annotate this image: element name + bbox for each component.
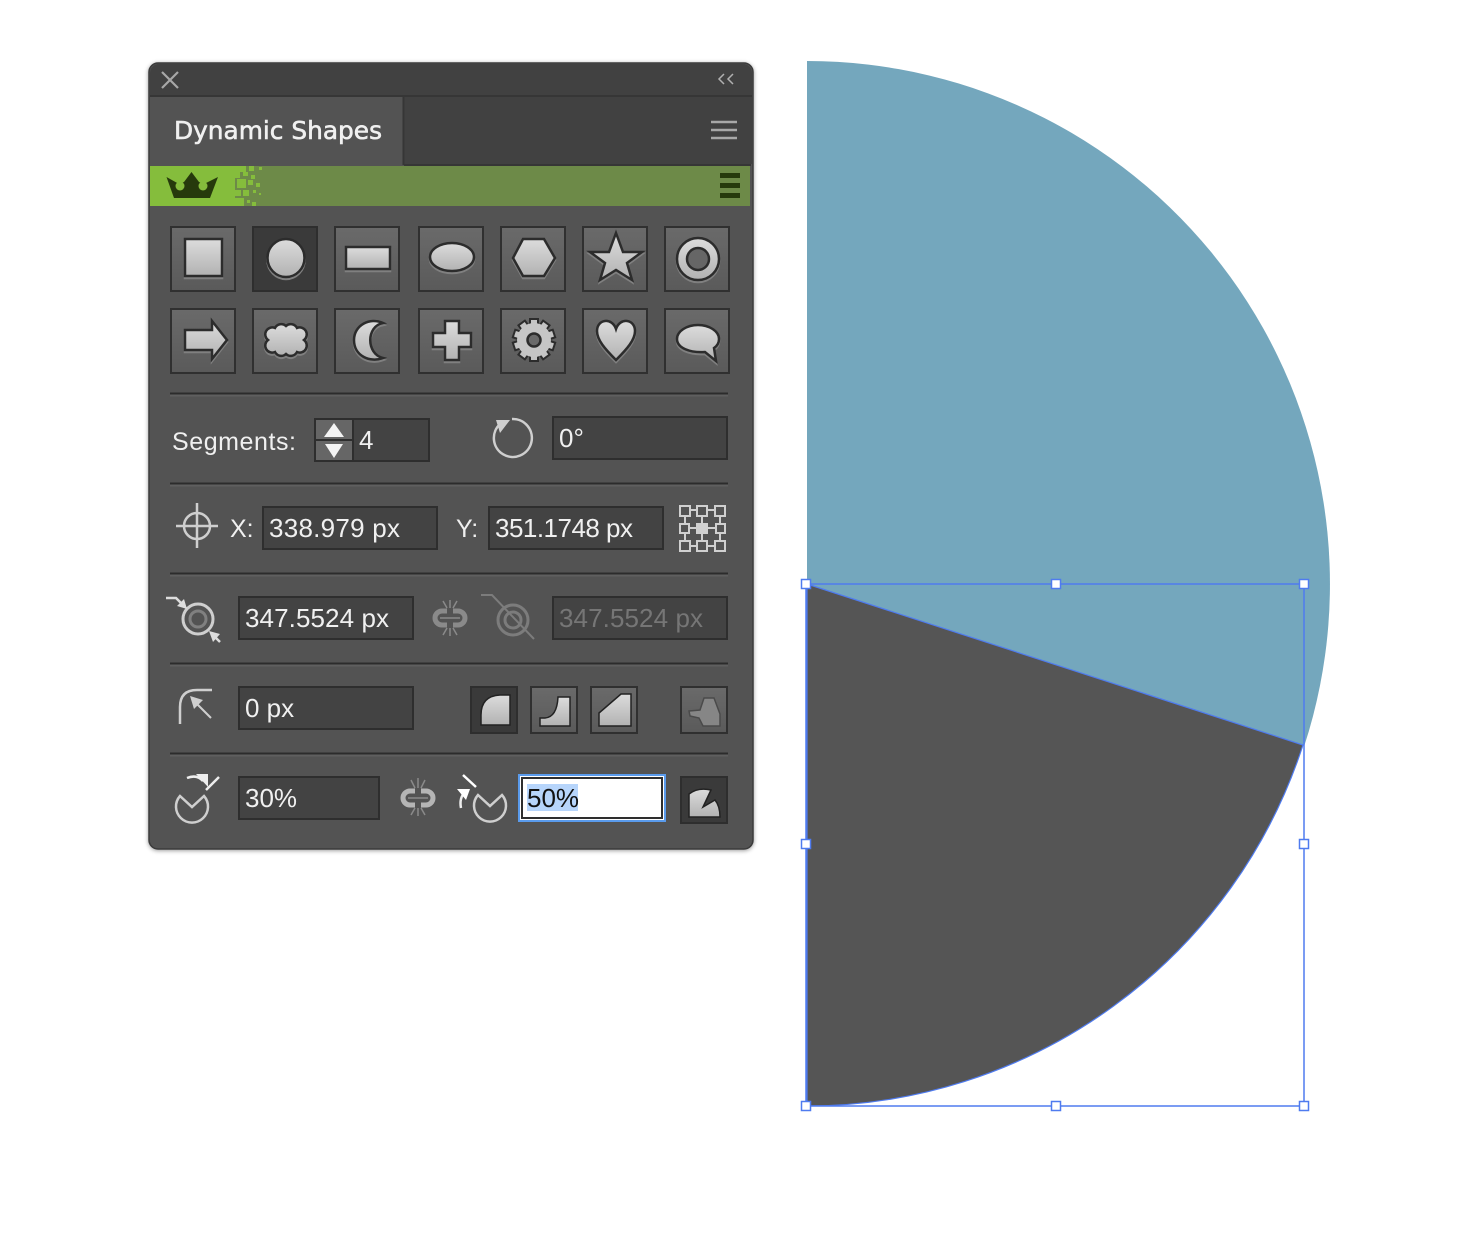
icon: pie end angle [457, 775, 506, 822]
icon: crosshair position [176, 503, 218, 548]
field: Y: 351.1748 px [495, 513, 633, 543]
field: radius 1 [239, 597, 413, 639]
field: corner radius [239, 687, 413, 729]
icon: link pie [403, 778, 433, 816]
button: corner style disabled [681, 687, 727, 733]
icon: banner menu [720, 173, 740, 198]
icon: reference point grid [680, 506, 725, 551]
pie segment: dark grey selected [807, 584, 1303, 1106]
label: Y: Y: [456, 515, 478, 543]
tab strip [404, 97, 752, 164]
banner: green plugin bar [150, 166, 750, 206]
button: speech bubble [665, 309, 729, 373]
field: corner radius: 0 px [245, 693, 294, 723]
button: crescent moon [335, 309, 399, 373]
stepper field: segments [315, 419, 429, 461]
field: radius 1: 347.5524 px [245, 603, 389, 633]
icon: panel menu [711, 122, 737, 138]
pie segment: blue [807, 61, 1330, 746]
field: Y [489, 507, 663, 549]
shape buttons [171, 227, 729, 373]
selection bounding box [802, 580, 1308, 1110]
button: star [583, 227, 647, 291]
button: rectangle [335, 227, 399, 291]
row dividers [170, 394, 728, 756]
button: gear [501, 309, 565, 373]
field: rotation: 0° [559, 423, 584, 453]
icon: pie start angle [176, 774, 219, 823]
panel title bar [150, 64, 752, 95]
label: X: X: [230, 515, 254, 543]
button: pie corner selected [681, 777, 727, 823]
panel: Dynamic Shapes [149, 63, 753, 849]
stepper field: segments: 4 [359, 425, 373, 455]
button: round corner selected [471, 687, 517, 733]
field: pie start [239, 777, 379, 819]
heading: panel tab title: Dynamic Shapes [174, 116, 382, 145]
button: ellipse [419, 227, 483, 291]
pixel dissolve [235, 166, 262, 206]
field: radius 2 disabled: 347.5524 px [559, 603, 703, 633]
button: cross [419, 309, 483, 373]
button: ring [665, 227, 729, 291]
field: pie start: 30% [245, 783, 297, 813]
field: pie end focused: 50% [527, 783, 579, 813]
icon: rotation [494, 419, 532, 457]
label: segments: Segments: [172, 428, 296, 456]
icon: outer radius [166, 598, 220, 642]
panel body [149, 63, 753, 849]
button: cloud [253, 309, 317, 373]
button: heart [583, 309, 647, 373]
field: X: 338.979 px [269, 513, 400, 543]
button: arrow [171, 309, 235, 373]
button: chamfer corner [591, 687, 637, 733]
field: radius 2 disabled [553, 597, 727, 639]
button: square [171, 227, 235, 291]
field: X [263, 507, 437, 549]
field: pie end focused [519, 775, 665, 821]
field: rotation [553, 417, 727, 459]
icon: inner radius [481, 595, 534, 639]
button: hexagon [501, 227, 565, 291]
icon: crown [166, 172, 218, 198]
button: circle selected [253, 227, 317, 291]
icon: close [162, 72, 178, 88]
icon: link radii [435, 600, 465, 636]
button: inverted corner [531, 687, 577, 733]
icon: corner radius [180, 690, 212, 724]
icon: collapse chevrons [719, 74, 733, 84]
